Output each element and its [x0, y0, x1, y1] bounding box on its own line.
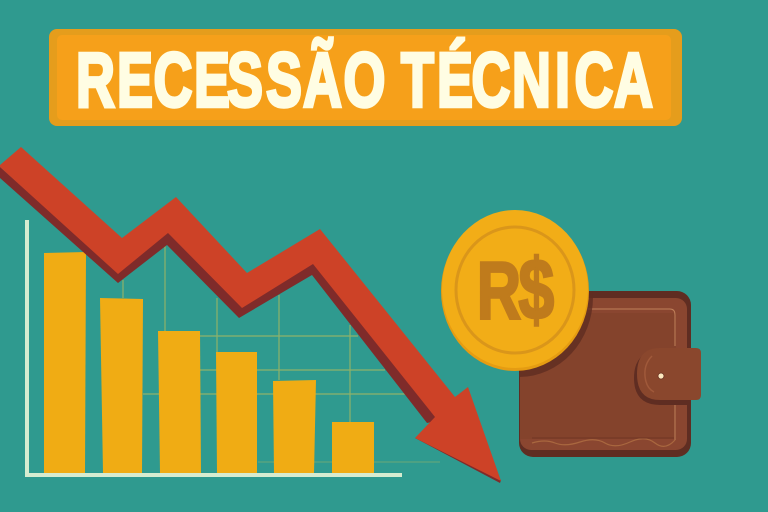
clasp stud: [658, 373, 664, 379]
wallet clasp: [634, 348, 701, 405]
chart axes: [25, 220, 402, 477]
title banner: [49, 29, 682, 126]
currency symbol: R$: [477, 242, 554, 338]
gold coin: [441, 210, 593, 377]
falling red arrow: [0, 147, 501, 483]
wallet: [519, 291, 701, 457]
title text: RECESSÃO TÉCNICA: [76, 37, 653, 124]
bars: [44, 252, 374, 473]
bar chart: [25, 220, 440, 477]
wallet stitching: [532, 439, 675, 446]
